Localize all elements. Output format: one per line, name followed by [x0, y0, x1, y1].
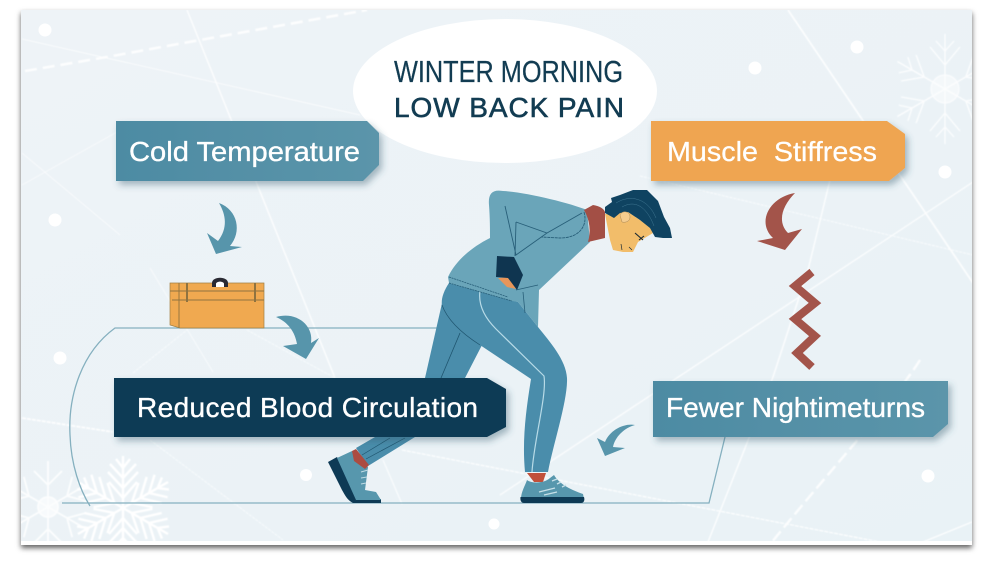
label: Reduced Blood Circulation: Reduced Blood Circulation: [137, 392, 478, 423]
ground outline: [62, 328, 725, 506]
icon: snowflakes bottom left: [21, 456, 169, 541]
label: Cold Temperature: [116, 121, 379, 181]
title line 2: LOW BACK PAIN: [394, 92, 624, 123]
back leg: [356, 290, 482, 466]
label: Fewer Nightimeturns: [653, 381, 948, 437]
collar: [584, 205, 605, 242]
label: Muscle Stiffress: Muscle Stiffress: [667, 136, 877, 167]
title line 1: WINTER MORNING: [394, 54, 623, 89]
title: [353, 19, 657, 163]
label: Reduced Blood Circulation: [114, 378, 506, 437]
label: Cold Temperature: Cold Temperature: [129, 136, 360, 167]
hair: [605, 190, 672, 238]
arrow: suitcase to reduced circulation: [276, 316, 319, 359]
face: [605, 212, 653, 252]
front shoe: [520, 473, 584, 503]
icon: zigzag pain: [795, 272, 815, 367]
icon: suitcase: [170, 278, 264, 328]
sweater: [448, 191, 590, 327]
figure: man bending with back pain: [328, 190, 672, 503]
hand skin: [498, 277, 516, 289]
ear and eye: [620, 212, 644, 250]
title ellipse: [353, 19, 657, 163]
arrow: cold to suitcase: [207, 203, 242, 254]
front leg: [442, 283, 567, 472]
label: Fewer Nightimeturns: Fewer Nightimeturns: [666, 392, 925, 423]
label: Muscle Stiffress: [651, 121, 905, 181]
icon: snowflake top right: [898, 34, 972, 144]
glove: [496, 256, 523, 290]
arrow: muscle stiffness down: [757, 193, 802, 250]
arrow: fewer turns to figure: [597, 425, 635, 456]
back shoe: [328, 449, 381, 503]
